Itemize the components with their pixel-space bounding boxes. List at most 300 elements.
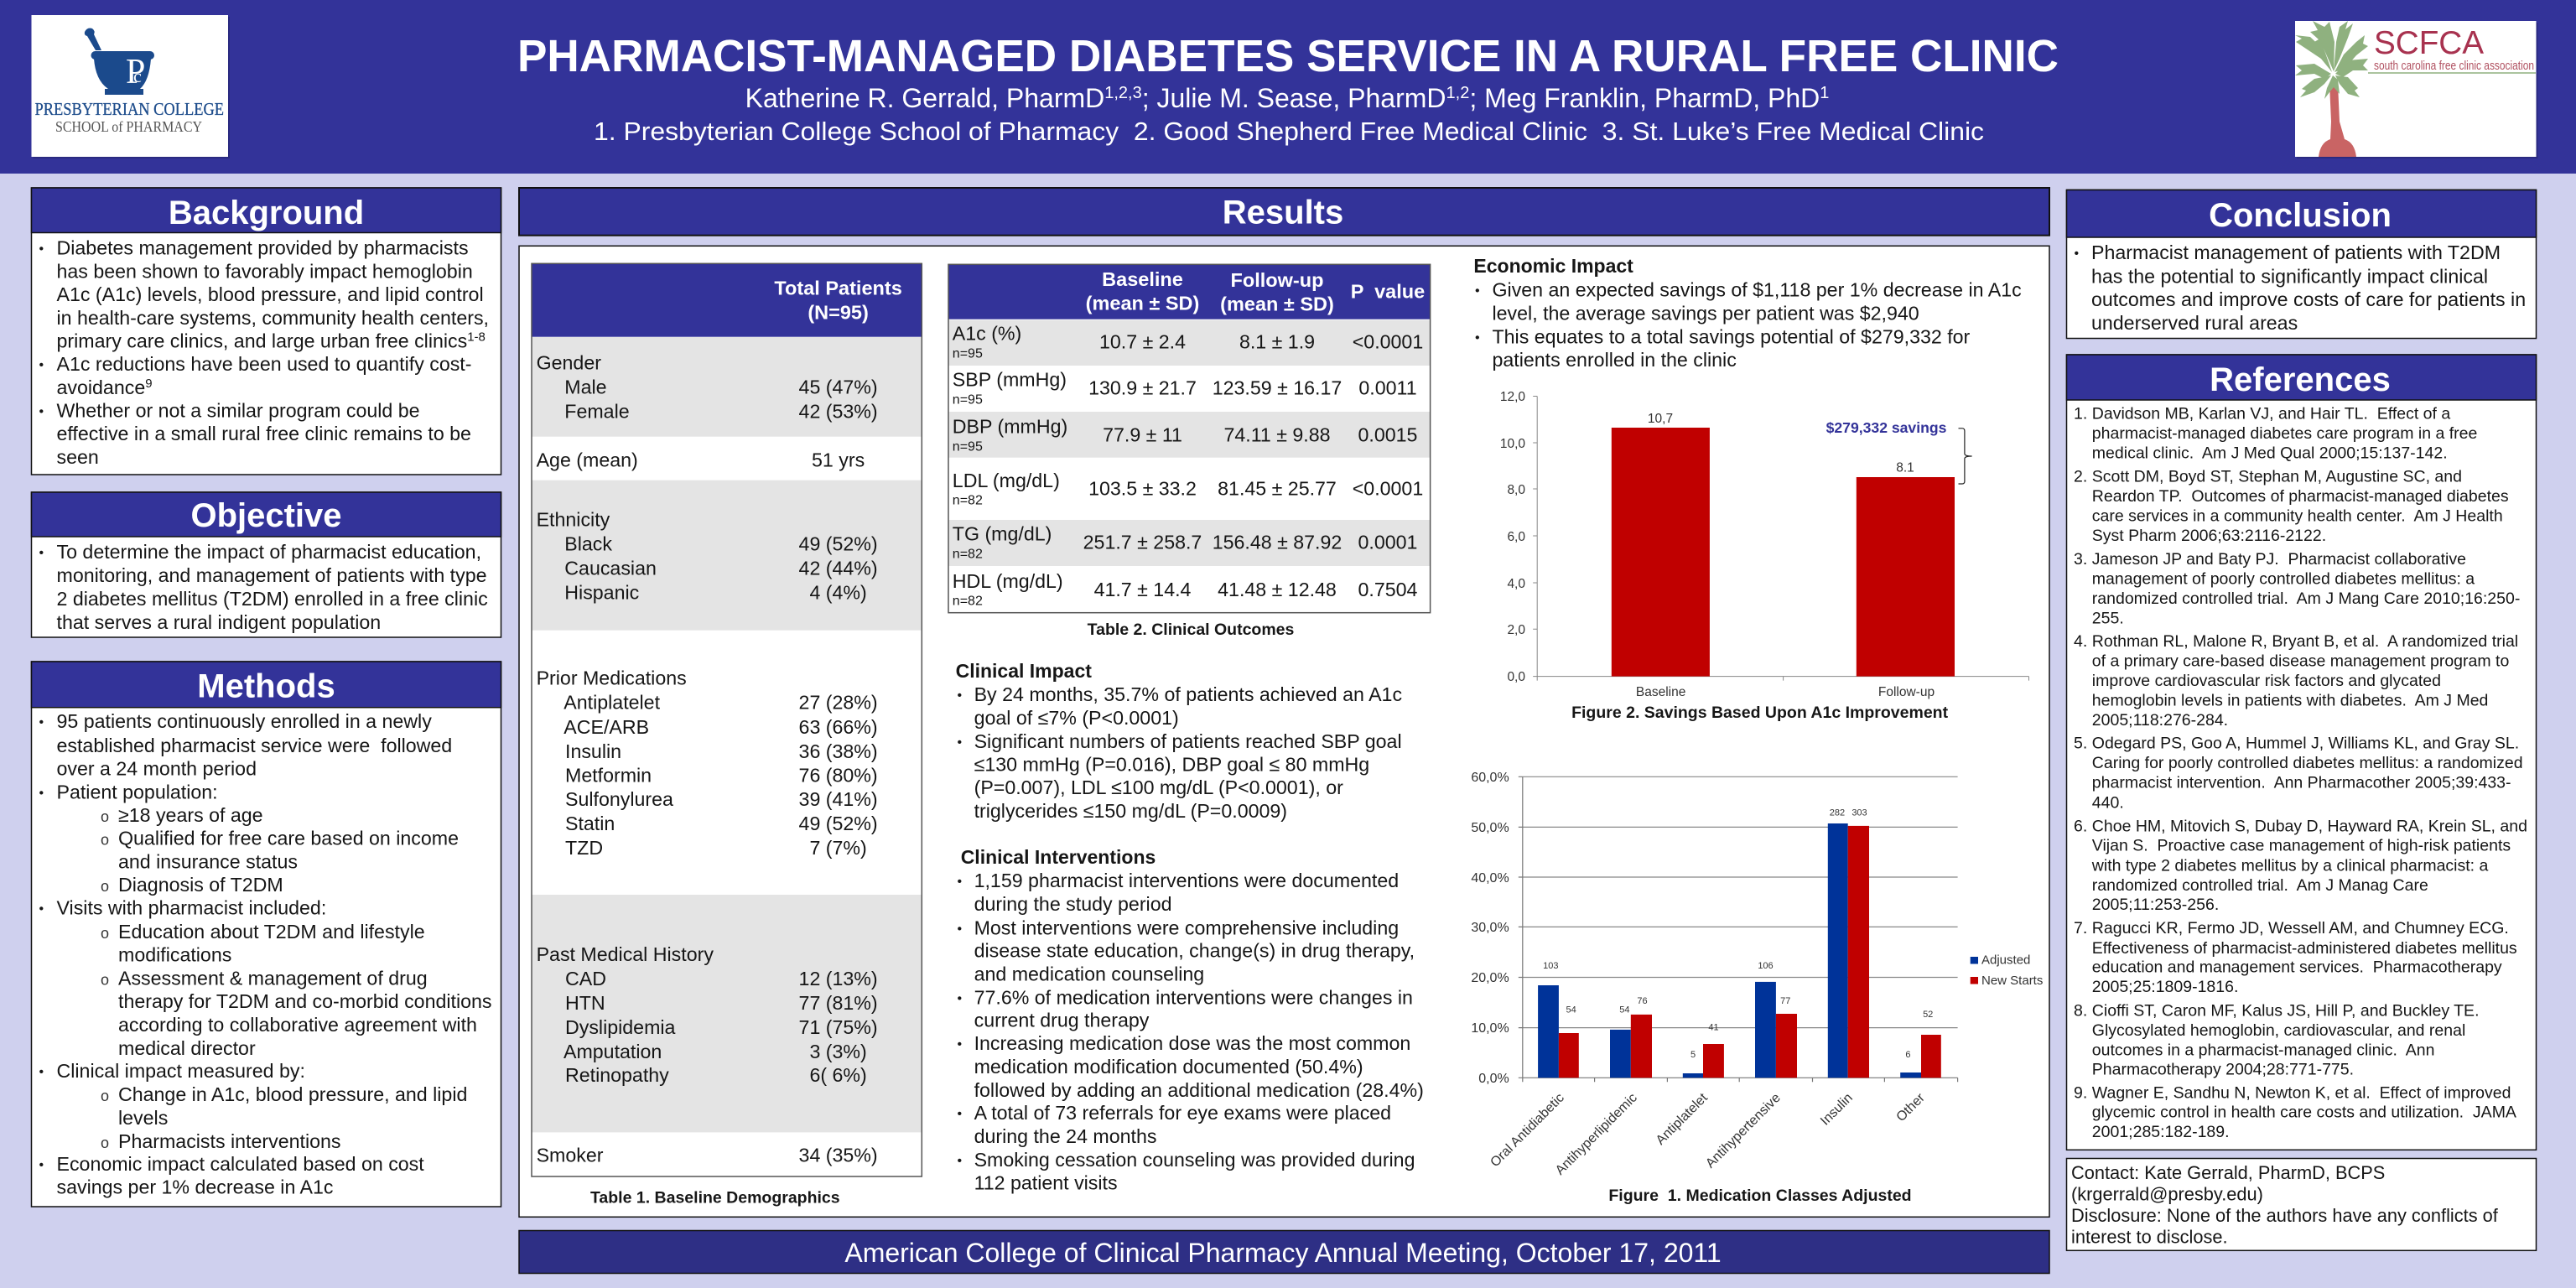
table 1: baseline demographics: TZD bbox=[565, 837, 603, 859]
reference list: outcomes in a pharmacist-managed clinic. Ann bbox=[2092, 1041, 2434, 1060]
background text: A1c (A1c) levels, blood pressure, and lipid control bbox=[57, 283, 484, 305]
economic impact text: level, the average savings per patient was $2,940 bbox=[1493, 302, 1919, 324]
table 1: baseline demographics: 42 (53%) bbox=[799, 401, 878, 423]
table 1: baseline demographics: CAD bbox=[565, 968, 606, 989]
chart: figure 1 medication classes: 52 bbox=[1923, 1010, 1933, 1020]
objective text: • bbox=[39, 546, 44, 560]
methods text: o bbox=[101, 878, 109, 895]
clinical interventions text: • bbox=[958, 1037, 962, 1052]
methods text: o bbox=[101, 832, 109, 849]
conclusion text: underserved rural areas bbox=[2091, 312, 2298, 334]
bars: antihyperlipidemic bbox=[1610, 1015, 1652, 1078]
economic impact text: • bbox=[1475, 283, 1480, 299]
reference list: Jameson JP and Baty PJ. Pharmacist collaborative bbox=[2092, 550, 2466, 569]
table 1: baseline demographics: Hispanic bbox=[564, 582, 639, 604]
table 1: baseline demographics: 36 (38%) bbox=[799, 740, 878, 762]
background text: primary care clinics, and large urban free clinics bbox=[57, 330, 467, 352]
conclusion text bbox=[2075, 242, 2526, 334]
background text: in health-care systems, community health centers, bbox=[57, 307, 489, 329]
reference list: Pharmacotherapy 2004;28:771-775. bbox=[2092, 1061, 2354, 1079]
clinical impact text: goal of ≤7% (P<0.0001) bbox=[974, 707, 1179, 729]
table 1: baseline demographics: 71 (75%) bbox=[799, 1016, 878, 1038]
reference list: Glycosylated hemoglobin, cardiovascular, and renal bbox=[2092, 1021, 2465, 1040]
table 2: clinical outcomes: (mean ± SD) bbox=[1220, 293, 1334, 315]
logo: South Carolina Free Clinic Association: south carolina free clinic association bbox=[2374, 59, 2534, 73]
reference list: randomized controlled trial. Am J Mang Care 2010;16:250- bbox=[2092, 589, 2520, 608]
table 2: clinical outcomes: 123.59 ± 16.17 bbox=[1213, 377, 1342, 399]
methods text: 95 patients continuously enrolled in a newly bbox=[57, 710, 432, 732]
clinical interventions text: A total of 73 referrals for eye exams were placed bbox=[974, 1102, 1391, 1124]
authors: ; Meg Franklin, PharmD, PhD bbox=[1469, 83, 1820, 113]
legend bbox=[1971, 953, 2043, 988]
methods text: o bbox=[101, 972, 109, 989]
conclusion text: outcomes and improve costs of care for patients in bbox=[2091, 288, 2526, 310]
chart: figure 2 savings bar chart: 8.1 bbox=[1896, 460, 1914, 475]
clinical impact text: Clinical Impact bbox=[956, 660, 1092, 682]
reference list: Reardon TP. Outcomes of pharmacist-managed diabetes bbox=[2092, 487, 2509, 506]
table 1: baseline demographics: 34 (35%) bbox=[799, 1144, 878, 1166]
economic impact text: Given an expected savings of $1,118 per 1% decrease in A1c bbox=[1493, 278, 2022, 300]
clinical interventions text: Increasing medication dose was the most common bbox=[974, 1032, 1410, 1054]
background text: 1-8 bbox=[467, 330, 486, 344]
background text: effective in a small rural free clinic remains to be bbox=[57, 423, 471, 444]
table 2: clinical outcomes: 251.7 ± 258.7 bbox=[1083, 532, 1202, 553]
table 2: clinical outcomes bbox=[948, 264, 1431, 613]
reference list: improve cardiovascular risk factors and glycated bbox=[2092, 672, 2441, 690]
table 1: baseline demographics: Gender bbox=[537, 352, 601, 374]
chart: figure 1 medication classes: 50,0% bbox=[1471, 821, 1509, 835]
reference list: 2001;285:182-189. bbox=[2092, 1123, 2230, 1141]
table 1: baseline demographics: Black bbox=[564, 533, 612, 555]
chart: figure 1 medication classes bbox=[1471, 771, 2043, 1178]
methods text: over a 24 month period bbox=[57, 758, 257, 780]
logo: Presbyterian College School of Pharmacy: PRESBYTERIAN COLLEGE bbox=[35, 99, 224, 119]
table 1: baseline demographics: ACE/ARB bbox=[564, 716, 649, 738]
methods text: Education about T2DM and lifestyle bbox=[118, 921, 425, 943]
table 2: clinical outcomes: Baseline bbox=[1102, 268, 1183, 290]
background text: A1c reductions have been used to quantify cost- bbox=[57, 353, 471, 375]
clinical interventions text bbox=[958, 846, 1424, 1194]
table 2: clinical outcomes: 8.1 ± 1.9 bbox=[1239, 331, 1315, 353]
logo: Presbyterian College School of Pharmacy bbox=[32, 15, 230, 158]
clinical interventions text: during the 24 months bbox=[974, 1125, 1156, 1147]
background text: • bbox=[39, 404, 44, 419]
background text: • bbox=[39, 242, 44, 257]
table 1: baseline demographics: Caucasian bbox=[564, 558, 657, 579]
bars: other bbox=[1900, 1035, 1941, 1078]
background text: avoidance bbox=[57, 377, 145, 398]
table 2: clinical outcomes: LDL (mg/dL) bbox=[953, 470, 1060, 491]
chart: figure 1 medication classes: 60,0% bbox=[1471, 771, 1509, 785]
background text: Whether or not a similar program could be bbox=[57, 399, 420, 421]
reference list: 8. bbox=[2074, 1002, 2087, 1021]
objective text: 2 diabetes mellitus (T2DM) enrolled in a free clinic bbox=[57, 588, 488, 610]
methods text bbox=[39, 710, 491, 1198]
clinical impact text: triglycerides ≤150 mg/dL (P=0.0009) bbox=[974, 800, 1287, 822]
chart: figure 1 medication classes: Other bbox=[1894, 1090, 1928, 1124]
table 2: clinical outcomes: 0.7504 bbox=[1358, 579, 1418, 600]
table 2: clinical outcomes: 41.48 ± 12.48 bbox=[1218, 579, 1337, 600]
chart: figure 2 savings bar chart bbox=[1500, 390, 2029, 699]
methods text: medical director bbox=[118, 1037, 256, 1059]
conclusion text: Pharmacist management of patients with T2DM bbox=[2091, 242, 2501, 263]
logo: South Carolina Free Clinic Association: SCFCA bbox=[2374, 25, 2484, 61]
table 1: baseline demographics: Ethnicity bbox=[537, 509, 610, 531]
bar: baseline bbox=[1612, 428, 1710, 677]
panel: background bbox=[32, 188, 501, 475]
footer bar: American College of Clinical Pharmacy Annual Meeting, October 17, 2011 bbox=[844, 1238, 1722, 1268]
reference list: randomized controlled trial. Am J Manag Care bbox=[2092, 876, 2428, 895]
objective text: that serves a rural indigent population bbox=[57, 611, 381, 633]
heading: conclusion: Conclusion bbox=[2209, 197, 2392, 234]
reference list: Ragucci KR, Fermo JD, Wessell AM, and Chumney ECG. bbox=[2092, 919, 2509, 937]
table 1: baseline demographics: Metformin bbox=[565, 765, 652, 787]
table 1: baseline demographics: HTN bbox=[565, 992, 605, 1014]
methods text: • bbox=[39, 902, 44, 917]
table 1: baseline demographics: Male bbox=[564, 377, 607, 398]
background text: Diabetes management provided by pharmacists bbox=[57, 236, 469, 258]
logo: South Carolina Free Clinic Association bbox=[2295, 21, 2537, 158]
table 1: baseline demographics: Statin bbox=[565, 813, 615, 834]
table 1: baseline demographics: 76 (80%) bbox=[799, 765, 878, 787]
table 1: baseline demographics: 4 (4%) bbox=[809, 582, 867, 604]
chart: figure 1 medication classes: 76 bbox=[1637, 996, 1648, 1006]
table 1: baseline demographics: 49 (52%) bbox=[799, 533, 878, 555]
background text: has been shown to favorably impact hemoglobin bbox=[57, 260, 473, 282]
methods text: Patient population: bbox=[57, 782, 218, 803]
chart: figure 1 medication classes: 30,0% bbox=[1471, 921, 1509, 935]
methods text: according to collaborative agreement with bbox=[118, 1014, 477, 1036]
table 2: clinical outcomes: 0.0015 bbox=[1358, 424, 1417, 446]
table 2: clinical outcomes: HDL (mg/dL) bbox=[953, 570, 1063, 592]
table 2: clinical outcomes: 41.7 ± 14.4 bbox=[1094, 579, 1192, 600]
methods text: Economic impact calculated based on cost bbox=[57, 1153, 424, 1175]
chart: figure 1 medication classes: 103 bbox=[1543, 961, 1558, 971]
reference list: 2005;118:276-284. bbox=[2092, 711, 2228, 730]
reference list: 2. bbox=[2074, 468, 2087, 486]
chart: figure 1 medication classes: Oral Antidiabetic bbox=[1488, 1091, 1567, 1170]
reference list: Scott DM, Boyd ST, Stephan M, Augustine SC, and bbox=[2092, 468, 2462, 486]
brace bbox=[1959, 428, 1972, 484]
chart: figure 1 medication classes: Antiplatelet bbox=[1654, 1090, 1711, 1148]
panel: methods bbox=[32, 662, 501, 1207]
table 1: baseline demographics: Female bbox=[564, 401, 630, 423]
chart: figure 2 savings bar chart: 2,0 bbox=[1507, 623, 1525, 637]
chart: figure 1 medication classes: 54 bbox=[1566, 1005, 1576, 1015]
heading: references: References bbox=[2210, 361, 2391, 398]
methods text: o bbox=[101, 925, 109, 942]
chart: figure 2 savings bar chart: 6,0 bbox=[1507, 530, 1525, 544]
table 2: clinical outcomes: n=82 bbox=[953, 548, 983, 562]
methods text: o bbox=[101, 1135, 109, 1151]
reference list: 3. bbox=[2074, 550, 2087, 569]
reference list: pharmacist-managed diabetes care program in a free bbox=[2092, 424, 2477, 443]
table 2: clinical outcomes: (mean ± SD) bbox=[1086, 292, 1199, 314]
bars: insulin bbox=[1828, 823, 1869, 1078]
reference list: of a primary care-based disease management program to bbox=[2092, 652, 2509, 671]
background text: 9 bbox=[145, 377, 153, 391]
chart: figure 1 medication classes: 20,0% bbox=[1471, 971, 1509, 985]
reference list: glycemic control in health care costs and utilization. JAMA bbox=[2092, 1104, 2516, 1122]
clinical impact text bbox=[956, 660, 1402, 822]
authors: ; Julie M. Sease, PharmD bbox=[1142, 83, 1446, 113]
table 2: clinical outcomes: n=95 bbox=[953, 347, 983, 361]
chart: figure 2 savings bar chart: 0,0 bbox=[1507, 670, 1525, 684]
table 2: clinical outcomes: <0.0001 bbox=[1353, 331, 1423, 353]
reference list: management of poorly controlled diabetes mellitus: a bbox=[2092, 570, 2475, 589]
table 1: baseline demographics: 27 (28%) bbox=[799, 692, 878, 714]
chart: figure 2 savings bar chart: 12,0 bbox=[1500, 390, 1525, 404]
footer bar bbox=[519, 1231, 2049, 1273]
background text bbox=[39, 236, 489, 468]
clinical impact text: Significant numbers of patients reached SBP goal bbox=[974, 730, 1402, 752]
methods text: Pharmacists interventions bbox=[118, 1130, 340, 1152]
table 2: clinical outcomes: 10.7 ± 2.4 bbox=[1099, 331, 1186, 353]
chart: figure 1 medication classes: 41 bbox=[1708, 1023, 1719, 1033]
clinical impact text: • bbox=[958, 688, 962, 703]
reference list: Wagner E, Sandhu N, Newton K, et al. Effect of improved bbox=[2092, 1083, 2511, 1102]
reference list: 2005;11:253-256. bbox=[2092, 896, 2219, 914]
reference list: pharmacist intervention. Ann Pharmacother 2005;39:433- bbox=[2092, 774, 2511, 792]
table 1: baseline demographics: Sulfonylurea bbox=[565, 788, 673, 810]
reference list: with type 2 diabetes mellitus by a clinical pharmacist: a bbox=[2091, 857, 2489, 875]
methods text: Change in A1c, blood pressure, and lipid bbox=[118, 1083, 467, 1105]
logo: Presbyterian College School of Pharmacy: P bbox=[126, 53, 145, 91]
clinical interventions text: 112 patient visits bbox=[974, 1172, 1118, 1194]
contact and disclosure box: (krgerrald@presby.edu) bbox=[2071, 1184, 2263, 1204]
table 2: clinical outcomes: A1c (%) bbox=[953, 323, 1021, 345]
methods text: • bbox=[39, 787, 44, 801]
icon: palm tree bbox=[2295, 21, 2368, 157]
savings callout: $279,332 savings bbox=[1826, 419, 1947, 436]
clinical interventions text: medication modification documented (50.4%) bbox=[974, 1056, 1363, 1078]
reference list: 5. bbox=[2074, 735, 2087, 753]
table 2: clinical outcomes: Follow-up bbox=[1231, 269, 1323, 291]
economic impact text bbox=[1473, 255, 2022, 371]
table 1 caption: Table 1. Baseline Demographics bbox=[590, 1188, 840, 1207]
table 2: clinical outcomes: P value bbox=[1351, 280, 1425, 302]
clinical interventions text: 1,159 pharmacist interventions were documented bbox=[974, 870, 1399, 891]
logo: Presbyterian College School of Pharmacy: c bbox=[133, 65, 142, 86]
heading: objective: Objective bbox=[190, 497, 342, 534]
table 2 caption: Table 2. Clinical Outcomes bbox=[1088, 621, 1295, 639]
chart: figure 2 savings bar chart: 10,0 bbox=[1500, 437, 1525, 451]
clinical interventions text: Most interventions were comprehensive including bbox=[974, 917, 1399, 938]
results heading bar bbox=[519, 188, 2049, 236]
table 1: baseline demographics: 63 (66%) bbox=[799, 716, 878, 738]
chart: figure 1 medication classes: 282 bbox=[1830, 808, 1845, 818]
methods text: therapy for T2DM and co-morbid conditions bbox=[118, 990, 491, 1012]
panel: results bbox=[519, 246, 2049, 1217]
chart: figure 1 medication classes: 6 bbox=[1905, 1050, 1910, 1060]
economic impact text: patients enrolled in the clinic bbox=[1493, 349, 1737, 371]
chart: figure 2 savings bar chart: Baseline bbox=[1636, 685, 1685, 699]
table 1: baseline demographics: Dyslipidemia bbox=[565, 1016, 676, 1038]
reference list: Cioffi ST, Caron MF, Kalus JS, Hill P, and Buckley TE. bbox=[2092, 1002, 2479, 1021]
background text: seen bbox=[57, 446, 99, 468]
contact and disclosure box bbox=[2066, 1159, 2536, 1250]
economic impact text: Economic Impact bbox=[1473, 255, 1633, 277]
reference list: 1. bbox=[2074, 405, 2087, 423]
objective text bbox=[39, 541, 488, 633]
heading: background: Background bbox=[169, 195, 364, 231]
reference list bbox=[2074, 405, 2527, 1141]
reference list: 6. bbox=[2074, 817, 2087, 835]
header banner bbox=[0, 0, 2576, 174]
table 2: clinical outcomes: 156.48 ± 87.92 bbox=[1213, 532, 1342, 553]
title: PHARMACIST-MANAGED DIABETES SERVICE IN A RURAL FREE CLINIC bbox=[517, 31, 2059, 81]
table 2: clinical outcomes: TG (mg/dL) bbox=[953, 522, 1052, 544]
panel: conclusion bbox=[2066, 190, 2536, 339]
reference list: 440. bbox=[2092, 793, 2124, 812]
affiliations: 1. Presbyterian College School of Pharmacy 2. Good Shepherd Free Medical Clinic 3. St. Luke’s Free Medical Clinic bbox=[594, 117, 1984, 146]
authors: Katherine R. Gerrald, PharmD bbox=[745, 83, 1104, 113]
table 1: baseline demographics: 12 (13%) bbox=[799, 968, 878, 989]
methods text: Diagnosis of T2DM bbox=[118, 874, 283, 896]
reference list: 7. bbox=[2074, 919, 2087, 937]
chart: figure 1 medication classes: 54 bbox=[1619, 1005, 1630, 1015]
table 2: clinical outcomes: DBP (mmHg) bbox=[953, 416, 1067, 438]
chart: figure 1 medication classes: 5 bbox=[1690, 1050, 1696, 1060]
clinical interventions text: Smoking cessation counseling was provided during bbox=[974, 1149, 1415, 1171]
methods text: • bbox=[39, 715, 44, 730]
table 2: clinical outcomes: 74.11 ± 9.88 bbox=[1223, 424, 1331, 446]
table 1: baseline demographics: 3 (3%) bbox=[809, 1041, 867, 1062]
table 2: clinical outcomes: n=82 bbox=[953, 494, 983, 508]
methods text: Visits with pharmacist included: bbox=[57, 897, 326, 919]
economic impact text: This equates to a total savings potential of $279,332 for bbox=[1493, 325, 1971, 347]
reference list: Caring for poorly controlled diabetes mellitus: a randomized bbox=[2092, 754, 2523, 772]
reference list: education and management services. Pharmacotherapy bbox=[2092, 958, 2502, 977]
table 1: baseline demographics: 7 (7%) bbox=[809, 837, 867, 859]
chart: figure 2 savings bar chart: 8,0 bbox=[1507, 483, 1525, 497]
table 1: baseline demographics: Past Medical History bbox=[537, 943, 714, 965]
methods text: and insurance status bbox=[118, 851, 298, 873]
methods text: modifications bbox=[118, 944, 231, 966]
table 2: clinical outcomes: 103.5 ± 33.2 bbox=[1088, 478, 1197, 500]
chart: figure 2 savings bar chart: Follow-up bbox=[1878, 685, 1935, 699]
table 1: baseline demographics: Amputation bbox=[564, 1041, 662, 1062]
clinical impact text: By 24 months, 35.7% of patients achieved an A1c bbox=[974, 683, 1402, 705]
clinical interventions text: Clinical Interventions bbox=[961, 846, 1156, 868]
clinical interventions text: • bbox=[958, 991, 962, 1006]
conclusion text: has the potential to significantly impact clinical bbox=[2091, 265, 2488, 287]
table 1: baseline demographics: Smoker bbox=[537, 1144, 604, 1166]
table 1: baseline demographics: 42 (44%) bbox=[799, 558, 878, 579]
clinical interventions text: followed by adding an additional medication (28.4%) bbox=[974, 1079, 1424, 1101]
table 2: clinical outcomes: SBP (mmHg) bbox=[953, 368, 1067, 390]
table 2: clinical outcomes: 77.9 ± 11 bbox=[1103, 424, 1182, 446]
table 2: clinical outcomes: n=95 bbox=[953, 393, 983, 408]
authors: 1,2,3 bbox=[1104, 84, 1142, 102]
figure 1 caption: Figure 1. Medication Classes Adjusted bbox=[1608, 1187, 1912, 1205]
panel: references bbox=[2066, 355, 2536, 1150]
methods text: o bbox=[101, 808, 109, 825]
chart: figure 1 medication classes: Insulin bbox=[1818, 1091, 1856, 1129]
reference list: 2005;25:1809-1816. bbox=[2092, 978, 2238, 996]
heading: methods: Methods bbox=[197, 668, 335, 705]
economic impact text: • bbox=[1475, 330, 1480, 345]
chart: figure 1 medication classes: Antihypertensive bbox=[1703, 1091, 1784, 1171]
table 1: baseline demographics: (N=95) bbox=[808, 302, 869, 324]
authors: 1,2 bbox=[1446, 84, 1469, 102]
methods text: Clinical impact measured by: bbox=[57, 1060, 305, 1082]
chart: figure 1 medication classes: 40,0% bbox=[1471, 871, 1509, 886]
table 2: clinical outcomes: n=95 bbox=[953, 439, 983, 454]
contact and disclosure box: Disclosure: None of the authors have any conflicts of bbox=[2071, 1205, 2499, 1226]
results heading bar: Results bbox=[1223, 195, 1343, 231]
methods text: • bbox=[39, 1158, 44, 1172]
chart: figure 1 medication classes: 10,0% bbox=[1471, 1021, 1509, 1036]
table 2: clinical outcomes: n=82 bbox=[953, 595, 983, 609]
chart: figure 1 medication classes: 303 bbox=[1852, 808, 1867, 818]
clinical impact text: • bbox=[958, 735, 962, 750]
clinical interventions text: • bbox=[958, 1154, 962, 1168]
panel: objective bbox=[32, 492, 501, 637]
objective text: To determine the impact of pharmacist education, bbox=[57, 541, 481, 563]
bars: antihypertensive bbox=[1755, 982, 1797, 1078]
reference list: Rothman RL, Malone R, Bryant B, et al. A randomized trial bbox=[2092, 632, 2518, 651]
reference list: Syst Pharm 2006;63:2116-2122. bbox=[2092, 527, 2326, 545]
table 2: clinical outcomes: 81.45 ± 25.77 bbox=[1218, 478, 1337, 500]
reference list: 9. bbox=[2074, 1083, 2087, 1102]
methods text: Assessment & management of drug bbox=[118, 968, 428, 989]
reference list: 4. bbox=[2074, 632, 2087, 651]
chart: figure 2 savings bar chart: 4,0 bbox=[1507, 577, 1525, 591]
logo: Presbyterian College School of Pharmacy: SCHOOL of PHARMACY bbox=[55, 118, 202, 135]
icon: mortar and pestle bbox=[85, 29, 154, 95]
table 1: baseline demographics: 6( 6%) bbox=[809, 1064, 867, 1086]
methods text: o bbox=[101, 1088, 109, 1104]
chart: figure 1 medication classes: 106 bbox=[1758, 961, 1774, 971]
methods text: savings per 1% decrease in A1c bbox=[57, 1176, 333, 1198]
reference list: 255. bbox=[2092, 609, 2124, 627]
table 1: baseline demographics: Retinopathy bbox=[565, 1064, 669, 1086]
clinical impact text: ≤130 mmHg (P=0.016), DBP goal ≤ 80 mmHg bbox=[974, 753, 1369, 775]
table 1: baseline demographics: Antiplatelet bbox=[564, 692, 661, 714]
table 1: baseline demographics: 51 yrs bbox=[812, 449, 865, 471]
clinical interventions text: and medication counseling bbox=[974, 963, 1204, 985]
reference list: medical clinic. Am J Med Qual 2000;15:137-142. bbox=[2092, 444, 2448, 462]
chart: figure 2 savings bar chart: 10,7 bbox=[1648, 412, 1673, 426]
table 2: clinical outcomes: <0.0001 bbox=[1353, 478, 1423, 500]
clinical interventions text: during the study period bbox=[974, 893, 1172, 915]
table 2: clinical outcomes: 0.0011 bbox=[1358, 377, 1417, 399]
authors: 1 bbox=[1820, 84, 1829, 102]
methods text: ≥18 years of age bbox=[118, 804, 263, 826]
methods text: levels bbox=[118, 1107, 168, 1129]
clinical interventions text: current drug therapy bbox=[974, 1009, 1150, 1031]
table 2: clinical outcomes: 0.0001 bbox=[1358, 532, 1417, 553]
bar: follow-up bbox=[1857, 477, 1955, 677]
table 1: baseline demographics: Insulin bbox=[565, 740, 621, 762]
methods text: Qualified for free care based on income bbox=[118, 828, 459, 849]
reference list: care services in a community health center. Am J Health bbox=[2092, 506, 2503, 525]
chart: figure 1 medication classes: Antihyperlipidemic bbox=[1553, 1091, 1640, 1178]
chart: figure 1 medication classes: 77 bbox=[1780, 996, 1790, 1006]
reference list: Effectiveness of pharmacist-administered diabetes mellitus bbox=[2092, 939, 2517, 958]
reference list: Davidson MB, Karlan VJ, and Hair TL. Effect of a bbox=[2092, 405, 2450, 423]
table 2: clinical outcomes: 130.9 ± 21.7 bbox=[1088, 377, 1197, 399]
clinical interventions text: • bbox=[958, 922, 962, 936]
table 1: baseline demographics: 39 (41%) bbox=[799, 788, 878, 810]
table 1: baseline demographics: Total Patients bbox=[774, 278, 902, 299]
methods text: established pharmacist service were followed bbox=[57, 735, 452, 756]
table 1: baseline demographics: Age (mean) bbox=[537, 449, 638, 471]
reference list: Choe HM, Mitovich S, Dubay D, Hayward RA, Krein SL, and bbox=[2092, 817, 2527, 835]
contact and disclosure box: Contact: Kate Gerrald, PharmD, BCPS bbox=[2071, 1162, 2385, 1183]
figure 2 caption: Figure 2. Savings Based Upon A1c Improvement bbox=[1571, 704, 1949, 722]
